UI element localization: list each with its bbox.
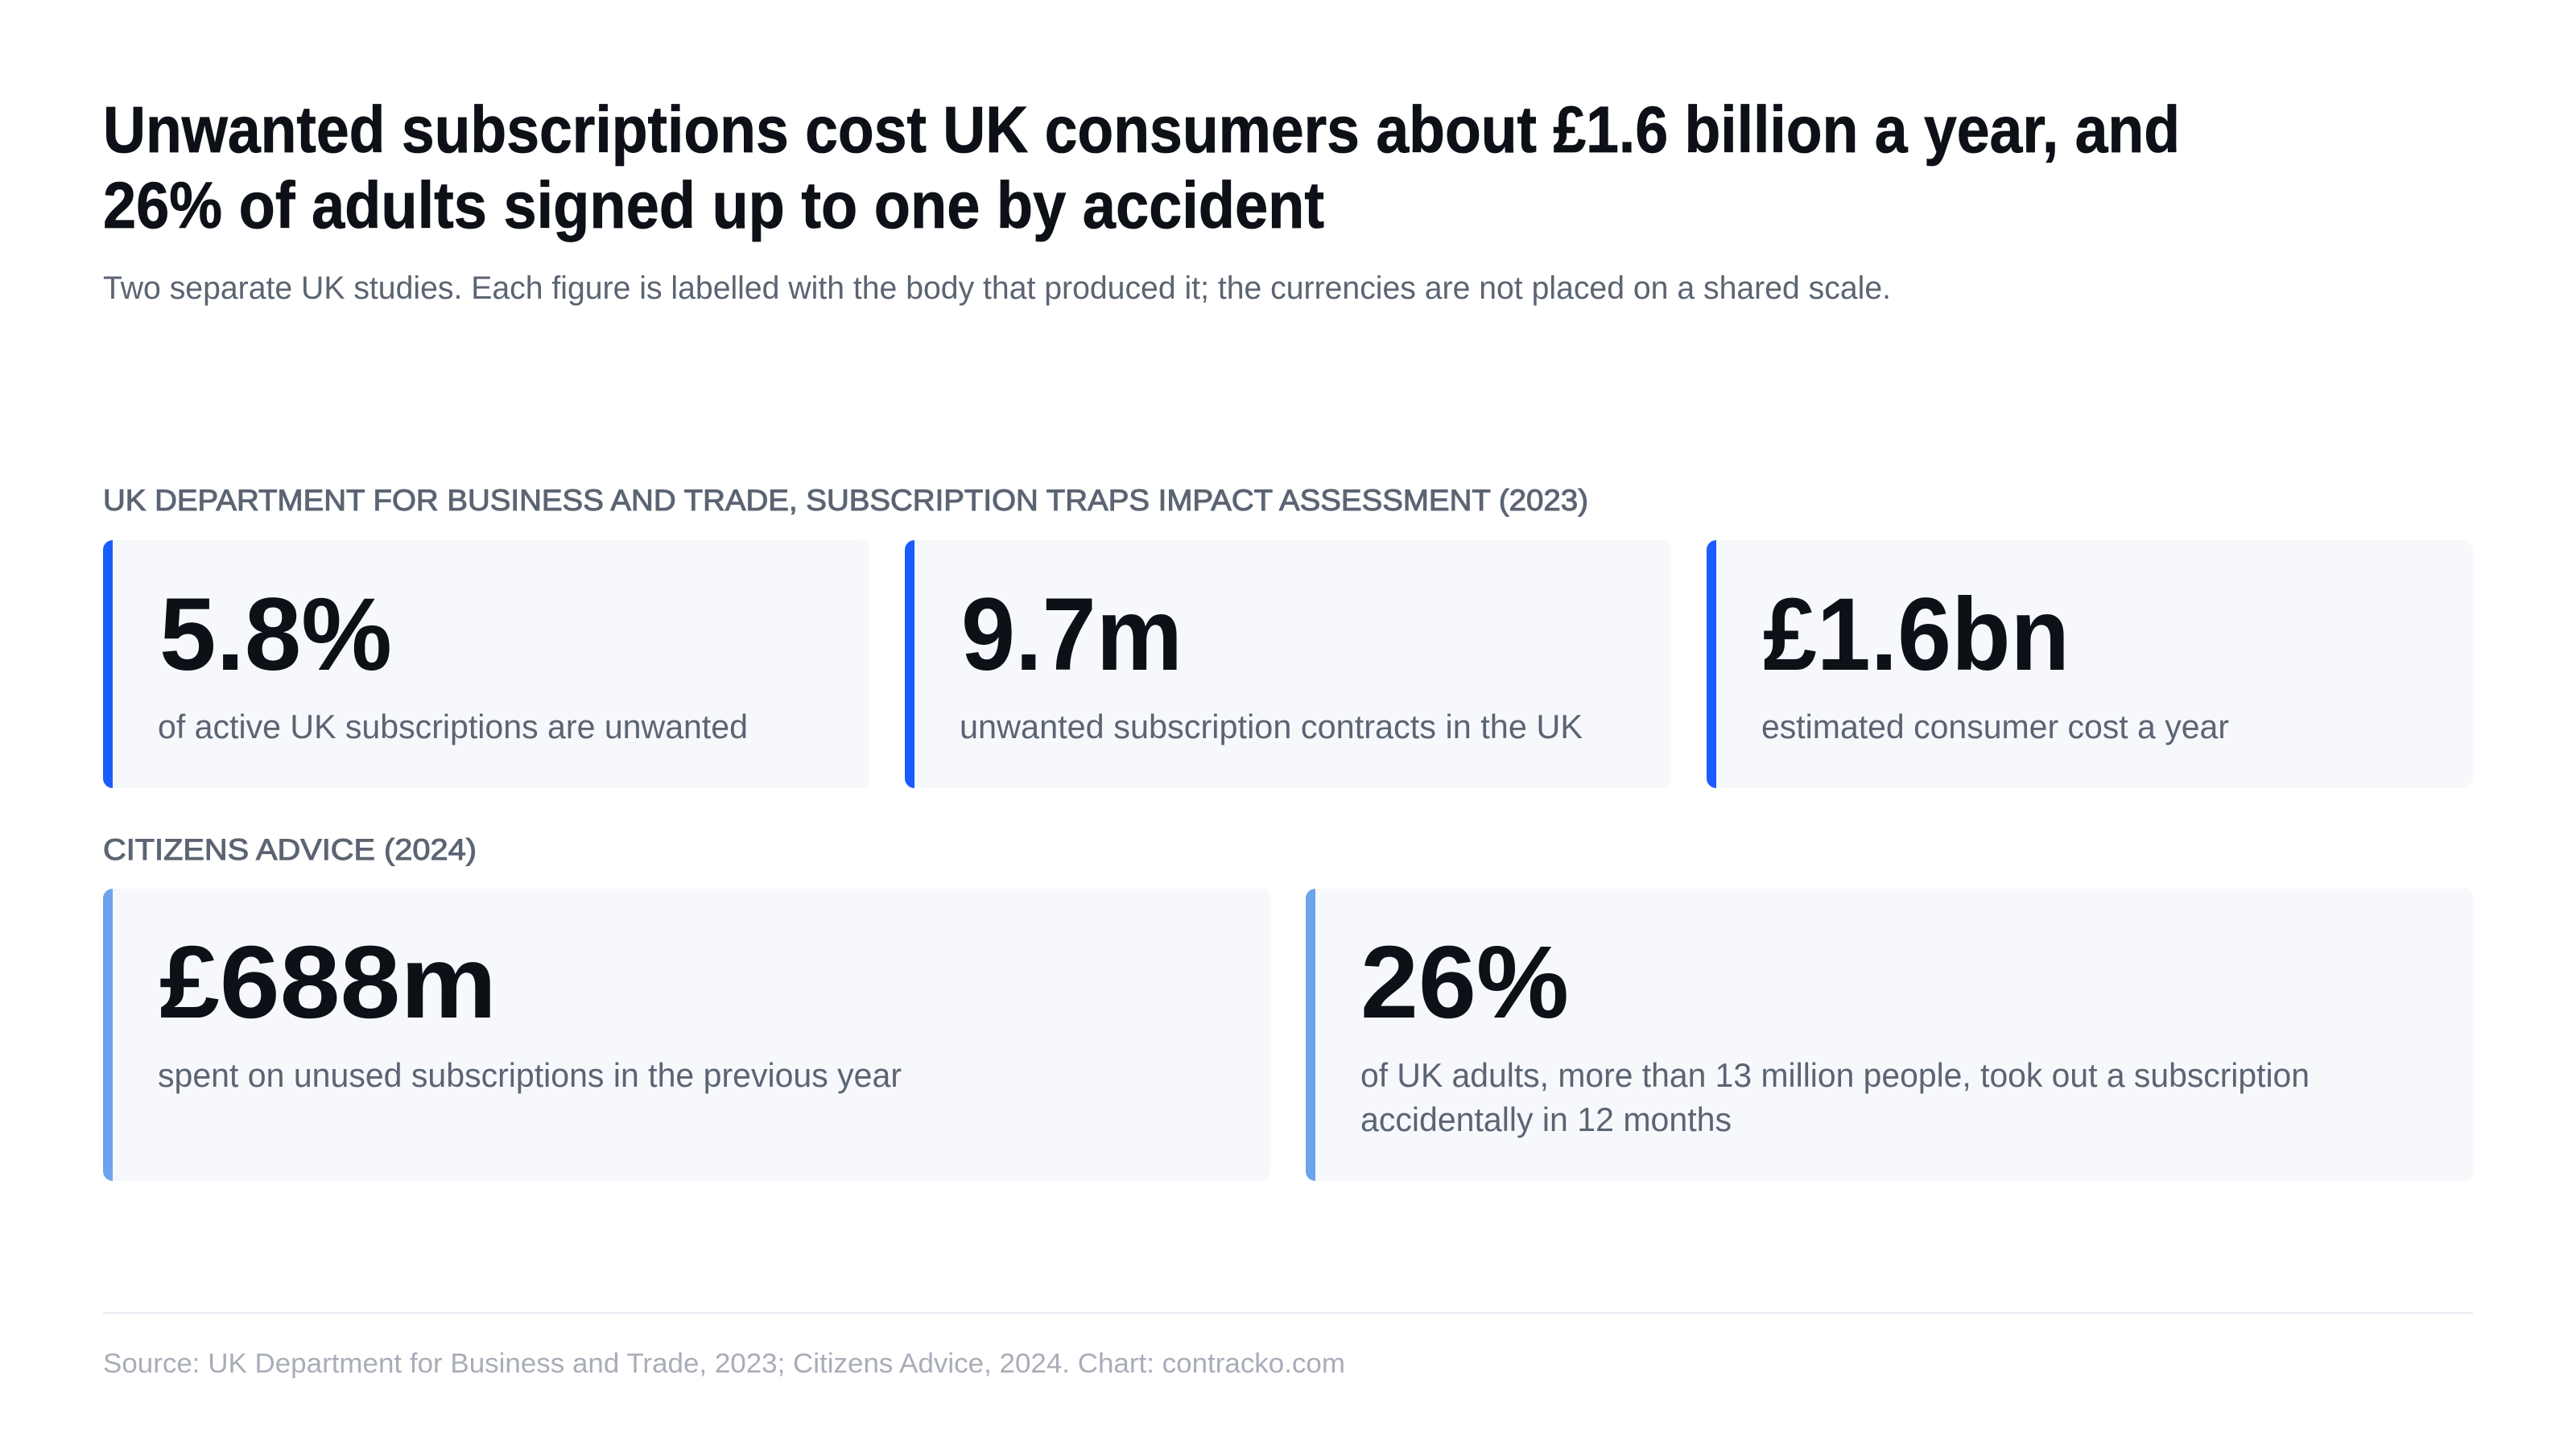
panel: 26% stat card: accidentally in 12 months	[1360, 1100, 1732, 1138]
panel: 5.8% stat card: 5.8%	[159, 577, 392, 692]
source footer: Source: UK Department for Business and Trade, 2023; Citizens Advice, 2024. Chart: contracko.com	[103, 1348, 1345, 1379]
panel: £688m stat card: spent on unused subscriptions in the previous year	[158, 1056, 902, 1094]
panel: 9.7m stat card	[905, 540, 1671, 788]
panel: £688m stat card	[103, 889, 1270, 1181]
title: Unwanted subscriptions cost UK consumers about £1.6 billion a year, and	[103, 93, 2180, 167]
panel: £688m stat card: £688m	[159, 925, 497, 1040]
panel: 9.7m stat card: unwanted subscription contracts in the UK	[960, 708, 1583, 745]
panel: 9.7m stat card: 9.7m	[961, 577, 1183, 692]
panel: 26% stat card	[1306, 889, 2473, 1181]
panel: 26% stat card: 26%	[1360, 925, 1569, 1040]
panel: £1.6bn stat card	[1707, 540, 2473, 788]
panel: 26% stat card: of UK adults, more than 13 million people, took out a subscription	[1360, 1056, 2310, 1094]
panel: £1.6bn stat card: estimated consumer cost a year	[1761, 708, 2229, 745]
section heading: Citizens Advice: CITIZENS ADVICE (2024)	[103, 833, 477, 866]
panel: 5.8% stat card: of active UK subscriptions are unwanted	[158, 708, 748, 745]
subtitle: Two separate UK studies. Each figure is labelled with the body that produced it; the currencies are not placed on a shared scale.	[103, 270, 1891, 306]
title: 26% of adults signed up to one by accident	[103, 169, 1324, 242]
panel: £1.6bn stat card: £1.6bn	[1763, 577, 2070, 692]
panel: 5.8% stat card	[103, 540, 869, 788]
title	[103, 93, 2180, 242]
section heading: UK Department for Business and Trade: UK DEPARTMENT FOR BUSINESS AND TRADE, SUBSCRIPTION TRAPS IMPACT ASSESSMENT (2023)	[103, 484, 1588, 517]
